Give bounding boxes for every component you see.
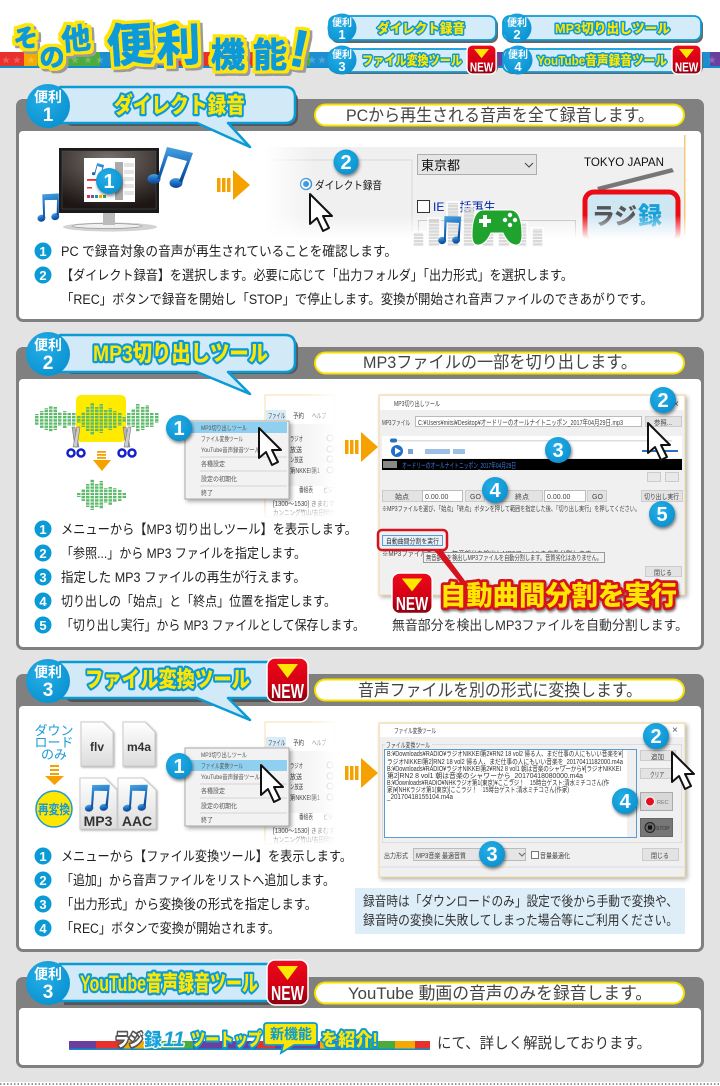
screenshot: radio select dialog: 録 <box>638 203 662 230</box>
screenshot: app window and menu <box>264 394 336 519</box>
screenshot: radio select dialog <box>264 135 686 251</box>
screenshot: context menu: MP3切り出しツール <box>201 423 247 432</box>
screenshot: context menu: 終了 <box>201 488 213 497</box>
badge: callout 1 on monitor: 1 <box>103 171 115 193</box>
icon: MP3 file: MP3 <box>84 813 113 829</box>
icon: music note <box>433 212 467 248</box>
arrow: to dialog <box>217 170 250 200</box>
screenshot: context menu: YouTube音声録音ツール <box>201 772 260 781</box>
screenshot: MP3 cutter dialog: 終点 <box>515 492 529 501</box>
steps list: 2 <box>39 546 47 561</box>
icon: small music note <box>31 189 66 225</box>
caption: 無音部分を検出しMP3ファイルを自動分割します。 <box>392 617 688 633</box>
screenshot: app window and menu: ビジ <box>323 485 333 494</box>
rainbow header strip <box>0 52 720 68</box>
icon: monitor <box>59 148 159 232</box>
text: download only <box>34 723 74 762</box>
screenshot: context menu: ファイル変換ツール <box>201 761 243 770</box>
screenshot: file converter dialog: B:¥Downloads¥RADIO¥NHKラジオ第1(東京)¥ここラジ！ 15時台ゲスト:清水ミチコさん(作 <box>387 778 609 787</box>
screenshot: app window and menu: ビジ <box>323 812 333 821</box>
screenshot: radio select dialog: IE 一括再生 <box>433 199 496 214</box>
screenshot: app window and menu: 番組表 <box>299 485 313 494</box>
steps list: 1 <box>39 244 47 259</box>
screenshot: context menu <box>185 748 289 826</box>
screenshot: app window and menu: [1300～1530] きまむず <box>273 826 335 835</box>
heading tab: MP3切り出しツール <box>93 341 268 366</box>
title: ! <box>285 19 313 79</box>
screenshot: context menu: 終了 <box>201 815 213 824</box>
badge: callout 2: 2 <box>340 152 352 174</box>
badge: reconvert: 再変換 <box>38 802 70 817</box>
screenshot: app window and menu: 第NKKEI第1 <box>290 793 320 802</box>
subtitle: YouTube 動画の音声のみを録音します。 <box>348 984 652 1003</box>
note box: 録音時は「ダウンロードのみ」設定で後から手動で変換や、 <box>363 893 678 909</box>
steps list: 1 <box>39 849 47 864</box>
callout: red highlight on auto split button <box>378 530 466 585</box>
note box <box>355 888 685 934</box>
screenshot: file converter dialog: B:¥Downloads¥RADIO¥ラジオNIKKEI第2¥RN2 8 vol1 朝は音楽のシャワーから¥[ラジオNIKKEI <box>387 764 621 773</box>
screenshot: radio select dialog: ダイレクト録音 <box>315 178 382 192</box>
badge: callout 2: 2 <box>650 726 662 748</box>
screenshot: MP3 cutter dialog: 閉じる <box>654 569 672 577</box>
panel: YouTube recording <box>16 960 704 1068</box>
icon: large music note <box>148 147 193 188</box>
heading tab: 3 <box>43 982 53 1003</box>
title: 他 <box>60 22 92 57</box>
icon: pointer <box>648 423 670 460</box>
heading tab: 便利 <box>34 966 62 982</box>
screenshot: file converter dialog: 出力形式 <box>384 851 408 860</box>
screenshot: MP3 cutter dialog: GO <box>470 494 481 501</box>
screenshot: radio select dialog: TOKYO JAPAN <box>584 155 664 169</box>
text: download only: ロード <box>34 735 74 750</box>
panel: direct recording <box>16 84 704 322</box>
arrow: to dialog <box>345 432 378 462</box>
navigation pill 1 <box>328 14 498 43</box>
screenshot: file converter dialog: 第2]RN2 8 vol1 朝は音楽のシャワーから_20170418080000.m4a <box>387 771 583 780</box>
screenshot: app window and menu: カンニング竹山/吉田明世 <box>273 835 335 844</box>
subtitle: PCから再生される音声を全て録音します。 <box>346 106 654 125</box>
screenshot: context menu: 設定の初期化 <box>201 474 237 483</box>
screenshot: file converter dialog: クリア <box>650 771 664 779</box>
heading tab: ファイル変換ツール <box>85 667 250 692</box>
screenshot: radio select dialog: ラジ <box>592 203 637 229</box>
steps list: 「出力形式」から変換後の形式を指定します。 <box>61 897 317 912</box>
screenshot: MP3 cutter dialog: × <box>673 399 679 410</box>
chart: waveform with selection <box>35 395 158 442</box>
screenshot: radio select dialog: 東京都 <box>421 158 460 173</box>
banner: rainbow link: 録 <box>144 1030 162 1050</box>
heading tab: 便利 <box>34 89 62 105</box>
navigation pill 2: 2 <box>513 27 521 42</box>
screenshot: context menu <box>185 421 289 499</box>
screenshot: app window and menu: ファイル <box>268 412 285 420</box>
screenshot: app window and menu: 放送 <box>290 445 302 454</box>
screenshot: MP3 cutter dialog: 参照... <box>654 418 672 427</box>
screenshot: MP3 cutter dialog: MP3ファイル <box>382 419 410 427</box>
banner: rainbow link: ラジ <box>115 1031 143 1050</box>
steps list: 「REC」ボタンで録音を開始し「STOP」で停止します。変換が開始され音声ファイルのできあがりです。 <box>61 291 653 307</box>
badge: NEW <box>392 573 432 615</box>
screenshot: file converter dialog: 音量最適化 <box>540 851 570 860</box>
icon: m4a file: m4a <box>127 740 151 754</box>
screenshot: file converter dialog: ファイル変換ツール <box>386 740 430 750</box>
heading tab: NEW <box>271 681 304 703</box>
badge: callout 3: 3 <box>486 844 498 866</box>
heading tab: YouTube音声録音ツール <box>80 971 258 996</box>
heading tab: NEW <box>271 983 304 1005</box>
badge: callout 4: 4 <box>619 791 631 813</box>
screenshot: MP3 cutter dialog: 無音部分を検出しMP3ファイルを自動分割します。音質劣化はありません。 <box>426 553 602 562</box>
navigation pill 2: MP3切り出しツール <box>555 21 670 36</box>
heading tab <box>26 84 298 147</box>
navigation pill 4 <box>503 45 703 74</box>
badge: callout 4 <box>612 788 638 814</box>
badge: callout 3: 3 <box>552 440 564 462</box>
steps list <box>34 242 653 307</box>
steps list: PC で録音対象の音声が再生されていることを確認します。 <box>61 243 397 259</box>
screenshot: app window and menu <box>264 721 336 846</box>
steps list: メニューから【ファイル変換ツール】を表示します。 <box>61 849 352 864</box>
screenshot: MP3 cutter dialog: MP3切り出しツール <box>394 399 440 408</box>
panel: MP3 cutter <box>16 332 704 650</box>
screenshot: MP3 cutter dialog: 始点 <box>395 492 409 501</box>
icon: MP3 file <box>80 778 117 829</box>
steps list <box>34 848 352 936</box>
title: 便 <box>105 17 155 73</box>
steps list: 指定した MP3 ファイルの再生が行えます。 <box>61 570 306 585</box>
screenshot: app window and menu: ヘルプ <box>312 412 326 420</box>
badge: callout 1: 1 <box>173 756 185 778</box>
navigation pill 4: NEW <box>675 60 698 74</box>
navigation pill 1: 1 <box>338 27 346 42</box>
steps list: 1 <box>39 522 47 537</box>
subtitle: MP3ファイルの一部を切り出します。 <box>363 353 637 372</box>
icon: AAC file <box>118 778 156 829</box>
screenshot: MP3 cutter dialog: GO <box>592 494 603 501</box>
badge: callout 2 <box>643 723 669 749</box>
arrow: down <box>93 451 111 471</box>
banner: rainbow link: 11 <box>163 1028 185 1051</box>
heading tab <box>26 658 308 720</box>
screenshot: MP3 cutter dialog: 自動曲間分割を実行 <box>386 536 439 546</box>
navigation pill 3: 便利 <box>332 48 352 61</box>
arrow: to dialog <box>345 758 378 788</box>
badge: callout 3 <box>479 841 505 867</box>
icon: left scissors <box>68 427 84 456</box>
steps list: 「追加」から音声ファイルをリストへ追加します。 <box>61 872 335 888</box>
badge: callout 2: 2 <box>657 390 669 412</box>
screenshot: file converter dialog: REC <box>657 800 669 806</box>
icon: pointer <box>259 428 281 465</box>
screenshot: file converter dialog <box>379 723 685 877</box>
screenshot: file converter dialog: 閉じる <box>651 852 669 860</box>
screenshot: file converter dialog: MP3音楽 最適音質 <box>416 851 466 860</box>
screenshot: file converter dialog: ファイル変換ツール <box>394 726 436 735</box>
navigation pill 1: 便利 <box>332 16 352 29</box>
steps list <box>34 520 365 634</box>
navigation pill 2 <box>502 14 703 43</box>
screenshot: app window and menu: ファイル <box>268 739 285 747</box>
screenshot: app window and menu: ン放送 <box>290 782 303 791</box>
screenshot: file converter dialog: _20170418155104.m4a <box>386 794 453 801</box>
badge: NEW: NEW <box>396 594 428 615</box>
screenshot: app window and menu: カンニング竹山/吉田明世 <box>273 508 335 517</box>
screenshot: context menu: 設定の初期化 <box>201 801 237 810</box>
icon: equalizer bars <box>413 202 543 247</box>
screenshot: context menu: MP3切り出しツール <box>201 750 247 759</box>
steps list: 「切り出し実行」から MP3 ファイルとして保存します。 <box>61 618 365 633</box>
icon: pointer <box>261 765 283 802</box>
icon: m4a file <box>123 722 155 766</box>
heading tab: 便利 <box>34 337 62 353</box>
icon: flv file <box>81 722 113 766</box>
banner: rainbow link: ツートップ <box>191 1030 262 1050</box>
screenshot: MP3 cutter dialog: C:¥Users¥mitsi¥Desktop¥オードリーのオールナイトニッポン_2017年04月29日.mp3 <box>418 417 623 427</box>
screenshot: app window and menu: 予約 <box>293 411 304 420</box>
screenshot: MP3 cutter dialog: 0.00.00 <box>425 494 448 501</box>
navigation pill 1: ダイレクト録音 <box>377 21 465 36</box>
steps list: 3 <box>39 570 47 585</box>
badge: callout 5 <box>649 501 675 527</box>
steps list: 「REC」ボタンで変換が開始されます。 <box>61 921 280 936</box>
heading tab <box>26 960 308 1005</box>
text: download only: のみ <box>41 747 67 762</box>
navigation pill 3: 3 <box>338 59 346 74</box>
steps list: 2 <box>39 873 47 888</box>
steps list: メニューから【MP3 切り出しツール】を表示します。 <box>61 522 357 537</box>
subtitle: 音声ファイルを別の形式に変換します。 <box>358 681 642 700</box>
screenshot: app window and menu: 放送 <box>290 772 302 781</box>
screenshot: app window and menu: ン放送 <box>290 455 303 464</box>
badge: callout 4: 4 <box>489 480 501 502</box>
heading tab: ダイレクト録音 <box>114 93 245 118</box>
screenshot: app window and menu: [1300～1530] きまむず <box>273 499 335 508</box>
navigation pill 3 <box>328 45 498 74</box>
text: link note: にて、詳しく解説しております。 <box>437 1035 651 1052</box>
icon: flv file: flv <box>90 740 104 754</box>
screenshot: app window and menu: ラジオ <box>290 435 303 443</box>
navigation pill 2: 便利 <box>507 16 527 29</box>
icon: game pad <box>472 210 522 245</box>
heading tab: 2 <box>43 353 53 374</box>
banner: rainbow link <box>69 1023 430 1053</box>
steps list: 切り出しの「始点」と「終点」位置を指定します。 <box>61 594 336 609</box>
screenshot: app window and menu: ラジオ <box>290 762 303 770</box>
banner: rainbow link: 新機能 <box>270 1026 312 1042</box>
badge: callout 1: 1 <box>173 418 185 440</box>
screenshot: file converter dialog: ラジオNIKKEI第2]RN2 18 vol2 帰る人、まだ仕事の人にもいい音楽を_20170411182000.m4a <box>387 757 623 766</box>
banner: rainbow link: を紹介! <box>321 1029 378 1050</box>
screenshot: MP3 cutter dialog: 0.00.00 <box>547 494 570 501</box>
screenshot: context menu: ファイル変換ツール <box>201 434 243 443</box>
badge: callout 1 <box>166 753 192 779</box>
badge: callout 2 <box>650 387 676 413</box>
badge: callout 5: 5 <box>656 504 668 526</box>
title: 利 <box>156 21 201 72</box>
heading tab: 1 <box>43 105 54 126</box>
icon: pointer <box>310 194 332 231</box>
steps list: 5 <box>39 618 47 633</box>
screenshot: MP3 cutter dialog: 切り出し実行 <box>644 492 679 501</box>
navigation pill 4: 4 <box>514 59 522 74</box>
callout heading: auto split: 自動曲間分割を実行 <box>440 581 677 611</box>
screenshot: MP3 cutter dialog: ※MP3ファイルを選び、無音部分を検出しMP3ファイルを自動分割します。 <box>382 549 597 558</box>
badge: callout 3 <box>545 437 571 463</box>
steps list: 2 <box>39 268 47 283</box>
steps list: 4 <box>39 594 47 609</box>
screenshot: file converter dialog: 家)¥[NHKラジオ第1(東京)]ここラジ！ 15時台ゲスト:清水ミチコさん(作家) <box>387 785 569 794</box>
steps list: 4 <box>39 921 47 936</box>
navigation pill 4: 便利 <box>508 48 528 61</box>
navigation pill 3: ファイル変換ツール <box>362 53 462 68</box>
screenshot: MP3 cutter dialog <box>379 395 685 595</box>
arrow: down <box>45 765 64 785</box>
badge: callout 1 on monitor <box>96 168 122 194</box>
note box: 録音時の変換に失敗してしまった場合等にご利用ください。 <box>363 912 678 928</box>
screenshot: file converter dialog: × <box>672 725 678 736</box>
title: 機 <box>211 37 245 75</box>
panel: file converter <box>16 658 704 952</box>
steps list: 「参照...」から MP3 ファイルを指定します。 <box>61 546 306 561</box>
screenshot: app window and menu: ヘルプ <box>312 739 326 747</box>
navigation pill 4: YouTube音声録音ツール <box>537 53 667 68</box>
title <box>11 17 313 79</box>
screenshot: context menu: 各種設定 <box>201 459 225 468</box>
badge: callout 1 <box>166 415 192 441</box>
heading tab <box>26 332 298 394</box>
title: そ <box>11 23 42 56</box>
badge: reconvert <box>36 791 72 827</box>
screenshot: context menu: 各種設定 <box>201 786 225 795</box>
heading tab: 便利 <box>34 664 62 680</box>
screenshot: app window and menu: 番組表 <box>299 812 313 821</box>
screenshot: app window and menu: 予約 <box>293 738 304 747</box>
chart: clipped waveform <box>77 479 126 510</box>
badge: callout 4 <box>482 477 508 503</box>
text: download only: ダウン <box>34 723 74 738</box>
steps list: 3 <box>39 897 47 912</box>
screenshot: MP3 cutter dialog: オードリーのオールナイトニッポン_2017年04月29日 <box>402 460 516 470</box>
screenshot: file converter dialog: 追加 <box>651 752 664 761</box>
icon: pointer <box>672 752 694 789</box>
navigation pill 3: NEW <box>470 60 493 74</box>
badge: callout 2 <box>334 150 358 174</box>
title: の <box>39 44 65 72</box>
screenshot: file converter dialog: B:¥Downloads¥RADIO¥ラジオNIKKEI第2¥RN2 18 vol2 帰る人、まだ仕事の人にもいい音楽を¥[ <box>387 749 623 758</box>
title: 能 <box>253 37 287 75</box>
heading tab: 3 <box>43 680 53 701</box>
screenshot: file converter dialog: STOP <box>656 826 670 832</box>
steps list: 【ダイレクト録音】を選択します。必要に応じて「出力フォルダ」「出力形式」を選択します。 <box>61 267 573 283</box>
screenshot: context menu: YouTube音声録音ツール <box>201 445 260 454</box>
icon: right scissors <box>118 427 136 456</box>
icon: AAC file: AAC <box>122 813 152 829</box>
screenshot: app window and menu: 第NKKEI第1 <box>290 466 320 475</box>
